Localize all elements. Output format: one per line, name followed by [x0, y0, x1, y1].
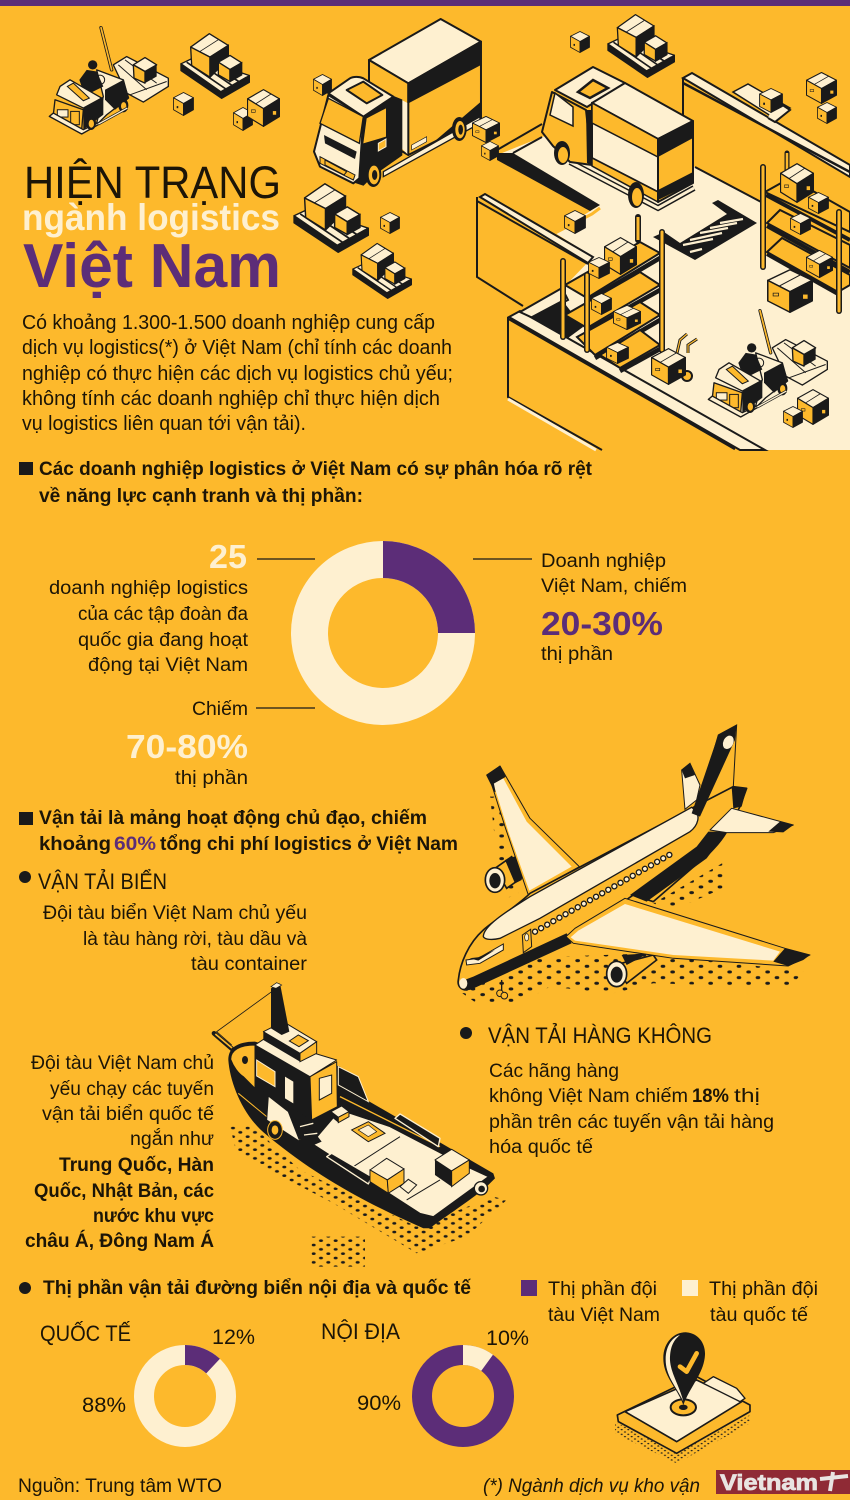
legend: Thị phần đội — [709, 1279, 818, 1300]
right shelves — [763, 153, 850, 311]
source: Nguồn: Trung tâm WTO — [18, 1476, 222, 1497]
donut left callout: 25 — [209, 538, 247, 575]
air transport heading: VẬN TẢI HÀNG KHÔNG — [488, 1023, 712, 1048]
donut left callout: Chiếm — [192, 699, 248, 720]
airplane — [458, 725, 810, 1003]
section heading 2: 60% — [114, 834, 156, 855]
icon: clipboard with location pin — [615, 1332, 750, 1463]
air transport text — [489, 1061, 774, 1158]
air transport text: hóa quốc tế — [489, 1137, 593, 1158]
donut right callout: Doanh nghiệp — [541, 551, 666, 572]
donut: international: 88% — [82, 1394, 126, 1417]
floor edge lines — [477, 73, 850, 450]
donut left callout: của các tập đoàn đa — [78, 604, 248, 625]
donut: international: 12% — [212, 1326, 255, 1349]
legend: tàu quốc tế — [710, 1305, 808, 1326]
donut left callout: doanh nghiệp logistics — [49, 578, 248, 599]
intro text — [22, 312, 453, 435]
title — [22, 157, 281, 301]
footnote: (*) Ngành dịch vụ kho vận — [483, 1476, 700, 1497]
cargo ship — [214, 983, 507, 1267]
air transport text: không Việt Nam chiếm — [489, 1086, 688, 1107]
top wall pallet — [733, 84, 790, 122]
donut: domestic — [321, 1319, 529, 1437]
floor hatch marking — [653, 200, 757, 260]
donut left callout: thị phần — [175, 768, 248, 789]
delivery truck on floor — [542, 67, 694, 208]
donut right callout — [473, 551, 687, 665]
intro text: nghiệp có thực hiện các dịch vụ logistics chủ yếu; — [22, 363, 453, 385]
donut: domestic: 10% — [486, 1327, 529, 1350]
scattered pallets and boxes — [174, 15, 836, 298]
left shelves — [520, 217, 662, 371]
intro text: dịch vụ logistics(*) ở Việt Nam (chỉ tính các doanh — [22, 337, 452, 359]
logo — [716, 1470, 850, 1495]
top purple bar — [0, 0, 850, 6]
air transport text: 18% — [692, 1086, 729, 1107]
ship route text: châu Á, Đông Nam Á — [25, 1230, 214, 1252]
ship route text: nước khu vực — [93, 1206, 214, 1227]
sea transport text: Đội tàu biển Việt Nam chủ yếu — [43, 903, 307, 924]
sea transport text — [43, 903, 308, 975]
ship route text: Đội tàu Việt Nam chủ — [31, 1053, 214, 1074]
air transport text: thị — [734, 1086, 760, 1107]
ship route text: yếu chạy các tuyến — [50, 1079, 214, 1100]
donut right callout: Việt Nam, chiếm — [541, 576, 687, 597]
main donut chart — [310, 560, 456, 706]
ship route text: Trung Quốc, Hàn — [59, 1155, 214, 1176]
donut right callout: 20-30% — [541, 605, 663, 642]
ship route text: ngắn như — [130, 1128, 214, 1150]
hand truck with box — [652, 334, 697, 384]
section heading 1 — [19, 459, 593, 507]
legend — [521, 1279, 818, 1326]
title line 3: Việt Nam — [23, 232, 281, 301]
intro text: vụ logistics liên quan tới vận tải). — [22, 413, 306, 435]
donut: domestic: 90% — [357, 1392, 401, 1415]
large truck — [314, 19, 481, 187]
air transport text: phần trên các tuyến vận tải hàng — [489, 1112, 774, 1133]
donut right callout: thị phần — [541, 644, 613, 665]
section heading 2: tổng chi phí logistics ở Việt Nam — [160, 834, 458, 855]
legend: Thị phần đội — [548, 1279, 657, 1300]
forklift in warehouse — [708, 311, 827, 417]
ship route text: vận tải biển quốc tế — [42, 1104, 214, 1125]
title line 1: HIỆN TRẠNG — [24, 157, 281, 208]
donut left callout: 70-80% — [126, 728, 248, 765]
donut left callout: quốc gia đang hoạt — [78, 630, 249, 651]
sea transport heading: VẬN TẢI BIỂN — [38, 869, 167, 894]
sea transport text: tàu container — [191, 954, 308, 975]
sea transport text: là tàu hàng rời, tàu dầu và — [83, 929, 307, 950]
warehouse floor — [497, 120, 850, 450]
market share heading: Thị phần vận tải đường biển nội địa và quốc tế — [43, 1278, 471, 1299]
intro text: Có khoảng 1.300-1.500 doanh nghiệp cung cấp — [22, 312, 435, 334]
logo: Vietnam — [720, 1470, 818, 1495]
intro text: không tính các doanh nghiệp chỉ thực hiện dịch — [22, 388, 440, 410]
section heading 2 — [19, 808, 458, 855]
donut left callout: động tại Việt Nam — [88, 655, 248, 676]
warehouse boxes — [565, 164, 833, 428]
title line 2: ngành logistics — [22, 197, 280, 238]
ship route text — [25, 1053, 214, 1252]
legend: tàu Việt Nam — [548, 1305, 660, 1326]
boxes behind truck — [472, 116, 500, 161]
forklift top left — [49, 28, 168, 134]
section heading 2: Vận tải là mảng hoạt động chủ đạo, chiếm — [39, 808, 427, 829]
section heading 1: Các doanh nghiệp logistics ở Việt Nam có sự phân hóa rõ rệt — [39, 459, 593, 480]
section heading 2: khoảng — [39, 834, 111, 855]
air transport text: Các hãng hàng — [489, 1061, 619, 1082]
section heading 1: về năng lực cạnh tranh và thị phần: — [39, 486, 363, 507]
ship route text: Quốc, Nhật Bản, các — [34, 1181, 214, 1202]
donut: domestic: NỘI ĐỊA — [321, 1319, 400, 1344]
donut: international — [40, 1320, 255, 1437]
donut: international: QUỐC TẾ — [40, 1320, 131, 1346]
warehouse illustration — [477, 67, 850, 450]
donut left callout — [49, 538, 315, 789]
